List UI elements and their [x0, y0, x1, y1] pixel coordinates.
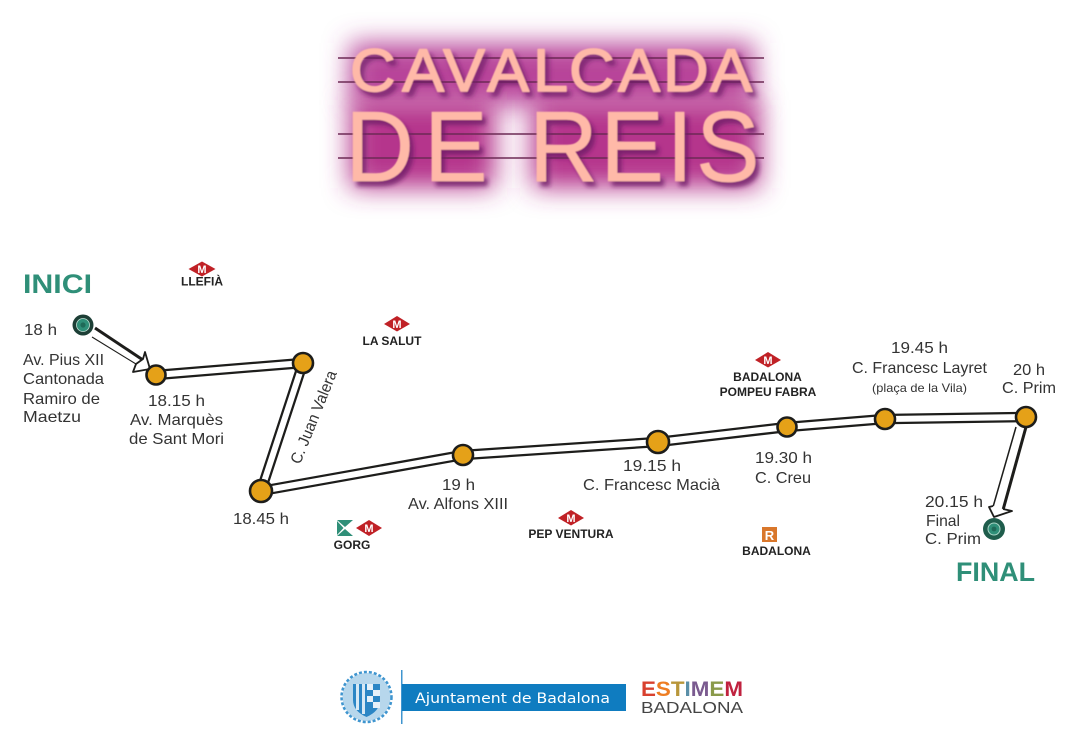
label: plaça de la Vila: (plaça de la Vila)	[872, 381, 967, 395]
logo: Ajuntament de Badalona	[342, 670, 626, 724]
label: 18.15 h: de Sant Mori	[129, 431, 224, 448]
label: 18 h: 18 h	[24, 322, 57, 339]
label: 19.30 h	[755, 450, 812, 487]
end marker	[983, 518, 1005, 540]
logo: Estimem Badalona: ESTIMEM	[641, 677, 743, 701]
metro: Badalona Pompeu Fabra	[720, 352, 817, 399]
metro: La Salut: M	[392, 319, 402, 331]
metro: Llefià: M	[197, 264, 207, 276]
metro and tram: Gorg: M	[364, 523, 374, 535]
label: 19.30 h: C. Creu	[755, 470, 811, 487]
icon: city coat of arms	[342, 672, 392, 722]
label: 19 h: Av. Alfons XIII	[408, 496, 508, 513]
label: 19.45 h	[852, 340, 988, 377]
label: 18.45 h: 18.45 h	[233, 511, 289, 528]
label: start address: Maetzu	[23, 409, 81, 426]
metro: La Salut	[363, 316, 422, 348]
label: 20.15 h	[925, 494, 983, 548]
label: C. Juan Valera: C. Juan Valera	[288, 368, 341, 466]
label: 20 h: C. Prim	[1002, 380, 1056, 397]
label: 18.15 h: 18.15 h	[148, 393, 205, 410]
title line: CAVALCADA: CAVALCADA	[350, 37, 752, 105]
label: 20.15 h: 20.15 h	[925, 494, 983, 511]
metro and tram: Gorg: GORG	[334, 538, 370, 552]
label: 20 h: 20 h	[1013, 362, 1045, 379]
route line	[156, 363, 1026, 491]
label: 20.15 h: C. Prim	[925, 531, 981, 548]
label: start address	[23, 352, 104, 426]
metro: Llefià: LLEFIÀ	[181, 274, 223, 288]
logo: Estimem Badalona	[641, 677, 743, 717]
label: 19.30 h: 19.30 h	[755, 450, 812, 467]
label: 19.45 h: C. Francesc Layret	[852, 360, 988, 377]
label: 18.15 h	[129, 393, 224, 448]
label: start address: Ramiro de	[23, 391, 100, 408]
rail: Badalona	[742, 527, 811, 558]
metro: Badalona Pompeu Fabra: BADALONA	[733, 370, 802, 384]
label: 19.15 h	[583, 458, 720, 494]
start marker	[72, 314, 94, 336]
metro and tram: Gorg	[334, 520, 382, 552]
metro: Badalona Pompeu Fabra: M	[763, 355, 773, 367]
metro: Pep Ventura: M	[566, 513, 576, 525]
label: 20.15 h: Final	[926, 513, 960, 530]
label: 19.15 h: C. Francesc Macià	[583, 477, 720, 494]
metro: Pep Ventura: PEP VENTURA	[528, 527, 614, 541]
label: 19 h: 19 h	[442, 477, 475, 494]
logo: Ajuntament de Badalona: Ajuntament de Badalona	[415, 691, 610, 707]
label: 20 h	[1002, 362, 1056, 397]
title line: DE REIS: DE REIS	[345, 91, 759, 203]
heading: INICI: INICI	[23, 269, 92, 299]
rail: Badalona: R	[765, 528, 775, 543]
label: 18.15 h: Av. Marquès	[130, 412, 223, 429]
label: 19 h	[408, 477, 508, 513]
metro: Llefià	[181, 262, 223, 288]
title: Cavalcada de Reis neon sign	[338, 37, 764, 203]
arrow: start of route	[92, 328, 150, 372]
rail: Badalona: BADALONA	[742, 544, 811, 558]
metro: La Salut: LA SALUT	[363, 334, 422, 348]
label: start address: Av. Pius XII	[23, 352, 104, 369]
label: start address: Cantonada	[23, 371, 104, 388]
logo: Estimem Badalona: BADALONA	[641, 700, 743, 717]
heading: FINAL: FINAL	[956, 557, 1035, 587]
label: 19.15 h: 19.15 h	[623, 458, 681, 475]
stops on the route	[146, 353, 1036, 502]
metro: Badalona Pompeu Fabra: POMPEU FABRA	[720, 385, 817, 399]
arrow: end of route	[989, 427, 1026, 517]
metro: Pep Ventura	[528, 510, 614, 541]
label: 19.45 h: 19.45 h	[891, 340, 948, 357]
